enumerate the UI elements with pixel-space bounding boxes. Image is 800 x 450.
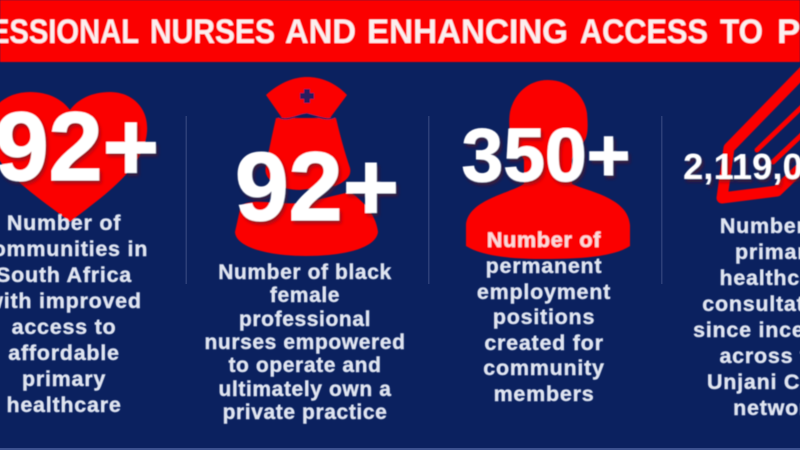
label: communities: South Africa	[0, 263, 132, 287]
label: nurses: private practice	[223, 401, 387, 424]
label: communities: access to	[12, 315, 116, 339]
title banner: TO	[720, 13, 763, 51]
number: 92+: 92+	[235, 132, 399, 241]
dividers	[186, 116, 662, 284]
label: communities: primary	[22, 367, 106, 391]
icon: nurse	[235, 77, 378, 256]
label: communities: affordable	[8, 341, 120, 365]
label: employment: community	[483, 356, 605, 380]
label: employment: Number of	[487, 228, 601, 252]
icon: pencil	[722, 34, 800, 198]
label: nurses: ultimately own a	[219, 378, 391, 401]
label: employment: employment	[477, 280, 611, 304]
label: employment: permanent	[486, 254, 602, 278]
title banner: AND	[285, 13, 356, 51]
label: employment: created for	[484, 331, 604, 355]
label: nurses: Number of black	[218, 261, 392, 284]
label: communities: Number of	[7, 211, 121, 235]
label: nurses: female	[270, 284, 340, 307]
panel: communities	[0, 92, 159, 417]
title banner	[0, 0, 800, 62]
title banner: NURSES	[150, 13, 275, 51]
title banner: ENHANCING	[367, 13, 568, 51]
label: nurses: nurses empowered	[204, 331, 406, 354]
title banner: ACCESS	[580, 13, 708, 51]
icon: heart	[0, 92, 147, 222]
label: employment: positions	[493, 305, 595, 329]
label: nurses: professional	[239, 308, 371, 331]
number: 350+: 350+	[462, 113, 630, 197]
panel: employment	[462, 80, 630, 406]
label: employment: members	[494, 382, 594, 406]
label: nurses: to operate and	[228, 354, 382, 377]
label: communities: healthcare	[6, 393, 122, 417]
panel: nurses	[204, 77, 406, 424]
icon: person	[466, 80, 630, 259]
panel: consultations	[683, 34, 800, 420]
